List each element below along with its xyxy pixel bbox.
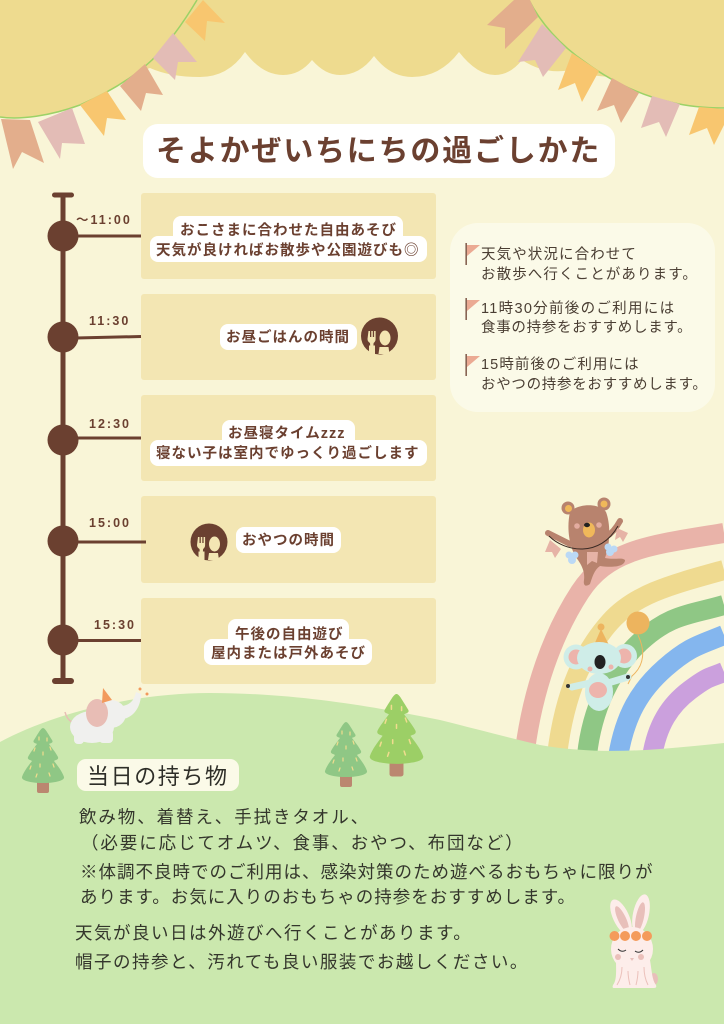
ground hill: [0, 693, 724, 1024]
bunting: top left: [0, 0, 225, 169]
panel: 12:30 nap: お昼寝タイムzzz: [228, 424, 345, 442]
illustration: koala with balloon: [564, 612, 650, 711]
text block: items to bring: [79, 807, 654, 907]
icon: fork and spoon: [190, 524, 228, 560]
time labels: 15:00: [89, 516, 131, 530]
panel: 12:30 nap: 寝ない子は室内でゆっくり過ごします: [156, 444, 420, 462]
panel: 15:00 snack: [141, 496, 436, 583]
panel: notes: 食事の持参をおすすめします。: [481, 319, 692, 336]
icon: fork and spoon: [361, 318, 398, 354]
icon: flag: [466, 354, 480, 376]
time labels: 〜11:00: [76, 213, 132, 227]
panel: notes: [450, 223, 715, 412]
panel: 15:30 afternoon play: 午後の自由遊び: [235, 625, 344, 643]
text block: outdoor play notice: 帽子の持参と、汚れても良い服装でお越しください。: [75, 952, 529, 972]
panel: 11:00 free play: [141, 193, 436, 279]
title: そよかぜいちにちの過ごしかた: [156, 134, 601, 168]
panel: 12:30 nap: [141, 395, 436, 481]
timeline connectors: [76, 236, 146, 640]
text block: items to bring: あります。お気に入りのおもちゃの持参をおすすめします。: [80, 887, 576, 907]
panel: 11:00 free play: おこさまに合わせた自由あそび: [180, 221, 397, 239]
illustration: elephant: [65, 688, 148, 744]
panel: 15:30 afternoon play: 屋内または戸外あそび: [211, 645, 366, 662]
rainbow: [525, 533, 724, 757]
time labels: [76, 213, 136, 632]
heading: items to bring: 当日の持ち物: [87, 764, 229, 789]
panel: notes: 15時前後のご利用には: [481, 356, 640, 373]
heading: items to bring: [77, 759, 239, 791]
panel: 11:30 lunch: お昼ごはんの時間: [226, 328, 350, 346]
icon: flag: [466, 298, 480, 320]
panel: 11:30 lunch: [141, 294, 436, 380]
panel: 15:30 afternoon play: [141, 598, 436, 684]
time labels: 12:30: [89, 417, 131, 431]
icon: flag: [466, 243, 480, 265]
illustration: tree middle: [325, 722, 367, 787]
panel: 11:00 free play: 天気が良ければお散歩や公園遊びも◎: [156, 241, 420, 259]
panel: notes: 天気や状況に合わせて: [481, 246, 637, 263]
title: [143, 124, 615, 178]
panel: notes: お散歩へ行くことがあります。: [481, 266, 698, 283]
panel: notes: おやつの持参をおすすめします。: [481, 376, 708, 393]
illustration: rabbit: [606, 893, 658, 988]
time labels: 15:30: [94, 618, 136, 632]
panel: 15:00 snack: おやつの時間: [242, 532, 335, 549]
text block: items to bring: （必要に応じてオムツ、食事、おやつ、布団など）: [81, 833, 525, 853]
illustration: tree left: [22, 728, 64, 793]
illustration: tree large: [370, 694, 423, 777]
timeline axis: [48, 192, 78, 684]
scalloped top band: [0, 0, 724, 77]
text block: items to bring: 飲み物、着替え、手拭きタオル、: [79, 807, 370, 827]
text block: items to bring: ※体調不良時でのご利用は、感染対策のため遊べるおもちゃに限りが: [80, 862, 654, 882]
text block: outdoor play notice: 天気が良い日は外遊びへ行くことがあります。: [75, 923, 472, 943]
text block: outdoor play notice: [75, 923, 529, 972]
illustration: bear with bunting: [545, 498, 628, 586]
bunting: top right: [487, 0, 724, 145]
panel: notes: 11時30分前後のご利用には: [481, 300, 675, 317]
time labels: 11:30: [89, 314, 130, 328]
